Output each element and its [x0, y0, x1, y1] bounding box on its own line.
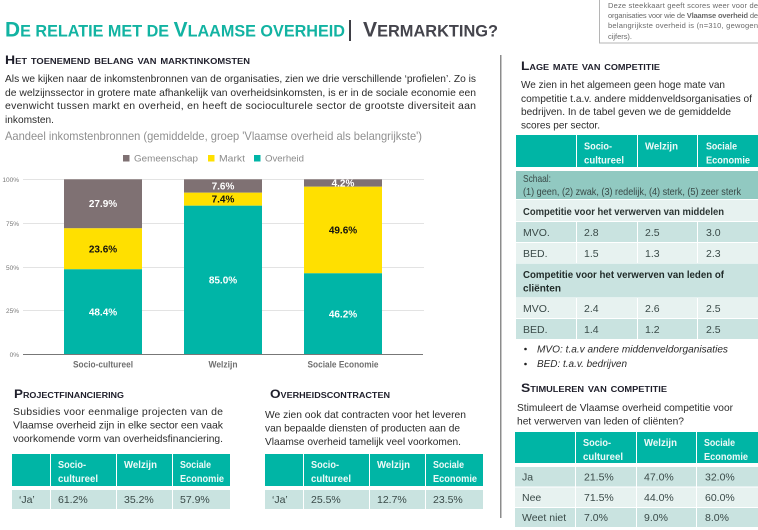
- text block: Subsidies voor eenmalige projecten van de: [13, 406, 223, 418]
- title: VERMARKTING?: [363, 19, 498, 42]
- row: nee: Nee: [522, 492, 541, 504]
- y axis labels: 0%: [10, 352, 19, 359]
- row: BED leden: 2.5: [706, 324, 721, 336]
- row: MVO middelen: 3.0: [706, 227, 721, 239]
- scale row: [516, 171, 758, 199]
- y axis labels: 25%: [6, 308, 19, 315]
- table header: cultureel: [583, 451, 623, 463]
- bar: socio-cultureel: [64, 179, 142, 354]
- intro paragraph: inkomsten.: [5, 114, 54, 126]
- table: Socio-: [58, 459, 86, 471]
- row: weet niet: [515, 508, 758, 527]
- bar: socio-cultureel: 27.9%: [89, 199, 117, 210]
- table: [12, 454, 230, 509]
- section row: leden of cliënten: Competitie voor het verwerven van leden of: [523, 269, 724, 281]
- section row: leden of cliënten: [516, 264, 758, 298]
- table: ‘Ja’: [19, 494, 35, 506]
- bar: welzijn: 7.4%: [212, 194, 235, 206]
- row: BED middelen: 2.3: [706, 248, 721, 260]
- text block: [517, 402, 733, 428]
- table: 35.2%: [124, 494, 154, 506]
- panel: projectfinanciering: [12, 387, 230, 509]
- row: weet niet: 8.0%: [705, 512, 729, 524]
- intro paragraph: [5, 73, 476, 126]
- title: [5, 19, 498, 42]
- note box: [600, 0, 758, 43]
- table: ‘Ja’: [272, 494, 288, 506]
- panel: lage mate van competitie: [516, 59, 758, 370]
- heading: Stimuleren van competitie: [521, 381, 668, 395]
- bar: sociale economie: [304, 178, 382, 354]
- row: MVO leden: 2.6: [645, 303, 660, 315]
- text block: Vlaamse overheid zijn in elke sector een vaak: [13, 420, 224, 432]
- title: DE RELATIE MET DE VLAAMSE OVERHEID: [5, 19, 345, 42]
- row: ja: 32.0%: [705, 472, 735, 484]
- row: MVO leden: 2.4: [584, 303, 599, 315]
- text block: van bepaalde diensten of producten aan de: [265, 422, 460, 434]
- table header: Socio-: [583, 437, 611, 449]
- y axis labels: 50%: [6, 265, 19, 272]
- row: MVO middelen: [516, 222, 758, 242]
- row: BED middelen: [516, 243, 758, 263]
- panel: overheidscontracten: [265, 387, 483, 509]
- table: [265, 454, 483, 509]
- x axis labels: Socio-cultureel: [73, 360, 133, 370]
- text block: het verwerven van leden of cliënten?: [517, 416, 684, 428]
- row: weet niet: 7.0%: [584, 512, 608, 524]
- text block: [521, 79, 752, 132]
- x axis labels: Welzijn: [208, 360, 238, 370]
- row: nee: 71.5%: [584, 492, 614, 504]
- bar: sociale economie: 49.6%: [329, 226, 357, 236]
- table: 57.9%: [180, 494, 210, 506]
- text block: bedrijven. In de tabel geven we de gemiddelde: [521, 106, 731, 118]
- row: nee: 60.0%: [705, 492, 735, 504]
- row: ja: 47.0%: [644, 472, 674, 484]
- table: Welzijn: [124, 459, 157, 471]
- note box: Deze steekkaart geeft scores weer voor de: [608, 1, 758, 10]
- table: 61.2%: [58, 494, 88, 506]
- stacked bar chart: [2, 177, 424, 370]
- text block: [13, 406, 224, 445]
- table: cultureel: [58, 473, 98, 485]
- table header: [516, 135, 758, 167]
- row: BED middelen: 1.3: [645, 248, 660, 260]
- chart legend: [123, 154, 304, 164]
- section row: middelen: [516, 200, 758, 221]
- table header: Welzijn: [644, 437, 677, 449]
- row: BED middelen: 1.5: [584, 248, 599, 260]
- section row: leden of cliënten: cliënten: [523, 282, 561, 294]
- note box: cijfers).: [608, 32, 632, 41]
- note box: organisaties voor wie de Vlaamse overheid de: [608, 11, 758, 20]
- chart legend: Gemeenschap: [134, 154, 198, 164]
- table: Socio-: [311, 459, 339, 471]
- table header: Economie: [706, 154, 750, 166]
- heading: Projectfinanciering: [14, 387, 124, 401]
- heading: Lage mate van competitie: [521, 59, 661, 73]
- bar: welzijn: 7.6%: [212, 182, 235, 192]
- table: Welzijn: [377, 459, 410, 471]
- footnotes: [524, 344, 729, 370]
- row: ja: [515, 467, 758, 486]
- vertical divider: [500, 55, 502, 518]
- table header: Sociale: [704, 437, 735, 449]
- row: MVO leden: [516, 298, 758, 318]
- bar: socio-cultureel: 23.6%: [89, 244, 117, 256]
- row: BED leden: [516, 319, 758, 339]
- row: nee: [515, 488, 758, 507]
- table header: cultureel: [584, 154, 624, 166]
- chart legend: Overheid: [265, 154, 304, 164]
- bar: socio-cultureel: 48.4%: [89, 308, 117, 318]
- table: 23.5%: [433, 494, 463, 506]
- row: MVO middelen: MVO.: [523, 227, 550, 239]
- footnotes: MVO: t.a.v andere middenveldorganisaties: [537, 344, 729, 356]
- text block: voorkomende vorm van overheidsfinanciering.: [13, 433, 223, 445]
- text block: Vlaamse overheid tamelijk veel voorkomen.: [265, 436, 461, 448]
- row: ja: 21.5%: [584, 472, 614, 484]
- table: Sociale: [180, 459, 211, 471]
- text block: Stimuleert de Vlaamse overheid competitie voor: [517, 402, 733, 414]
- row: ja: Ja: [522, 472, 533, 484]
- table: Economie: [433, 473, 477, 485]
- chart title: Aandeel inkomstenbronnen (gemiddelde, groep 'Vlaamse overheid als belangrijkste'): [5, 129, 422, 143]
- table: cultureel: [311, 473, 351, 485]
- table: Economie: [180, 473, 224, 485]
- text block: We zien in het algemeen geen hoge mate van: [521, 79, 725, 91]
- y axis labels: 75%: [6, 221, 19, 228]
- bar: welzijn: [184, 179, 262, 354]
- bar: sociale economie: 4.2%: [332, 178, 355, 190]
- text block: competitie t.a.v. andere middenveldsorganisaties of: [521, 93, 752, 105]
- table: 12.7%: [377, 494, 407, 506]
- section row: middelen: Competitie voor het verwerven van middelen: [523, 206, 724, 218]
- footnotes: BED: t.a.v. bedrijven: [537, 358, 627, 370]
- scale row: Schaal:: [523, 173, 551, 185]
- table header: Sociale: [706, 140, 737, 152]
- row: MVO middelen: 2.5: [645, 227, 660, 239]
- note box: belangrijkste overheid is (n=310, gewogen: [608, 21, 758, 30]
- intro paragraph: evenwicht tussen markt en overheid, en heeft de socioculturele sector de grootste diversiteit aan: [5, 100, 476, 112]
- heading: marktinkomsten: Het toenemend belang van marktinkomsten: [5, 53, 250, 67]
- chart legend: Markt: [219, 154, 245, 164]
- table: Sociale: [433, 459, 464, 471]
- row: weet niet: Weet niet: [522, 512, 566, 524]
- row: MVO leden: 2.5: [706, 303, 721, 315]
- table header: [515, 432, 758, 463]
- y axis labels: [2, 177, 19, 359]
- row: nee: 44.0%: [644, 492, 674, 504]
- row: BED leden: BED.: [523, 324, 548, 336]
- table header: Economie: [704, 451, 748, 463]
- table: competitie scores: [516, 135, 758, 339]
- text block: scores per sector.: [521, 120, 600, 132]
- intro paragraph: de welzijnssector in grotere mate afhankelijk van overheidsinkomsten, is er in de sociale economie een: [5, 87, 476, 99]
- y axis labels: 100%: [2, 177, 19, 184]
- heading: Overheidscontracten: [270, 387, 390, 401]
- panel: stimuleren van competitie: [515, 381, 758, 527]
- table header: Socio-: [584, 140, 612, 152]
- bar: welzijn: 85.0%: [209, 276, 237, 286]
- table: 25.5%: [311, 494, 341, 506]
- row: BED leden: 1.4: [584, 324, 599, 336]
- row: weet niet: 9.0%: [644, 512, 668, 524]
- row: BED leden: 1.2: [645, 324, 660, 336]
- x axis labels: Sociale Economie: [308, 360, 379, 370]
- x axis labels: [73, 360, 379, 370]
- row: BED middelen: BED.: [523, 248, 548, 260]
- bar: sociale economie: 46.2%: [329, 310, 357, 320]
- text block: [265, 409, 466, 448]
- row: MVO leden: MVO.: [523, 303, 550, 315]
- intro paragraph: Als we kijken naar de inkomstenbronnen van de organisaties, zien we drie verschillende ‘profielen’. Zo is: [5, 73, 476, 85]
- row: MVO middelen: 2.8: [584, 227, 599, 239]
- table header: Welzijn: [645, 140, 678, 152]
- table: stimuleren: [515, 432, 758, 527]
- text block: We zien ook dat contracten voor het leveren: [265, 409, 466, 421]
